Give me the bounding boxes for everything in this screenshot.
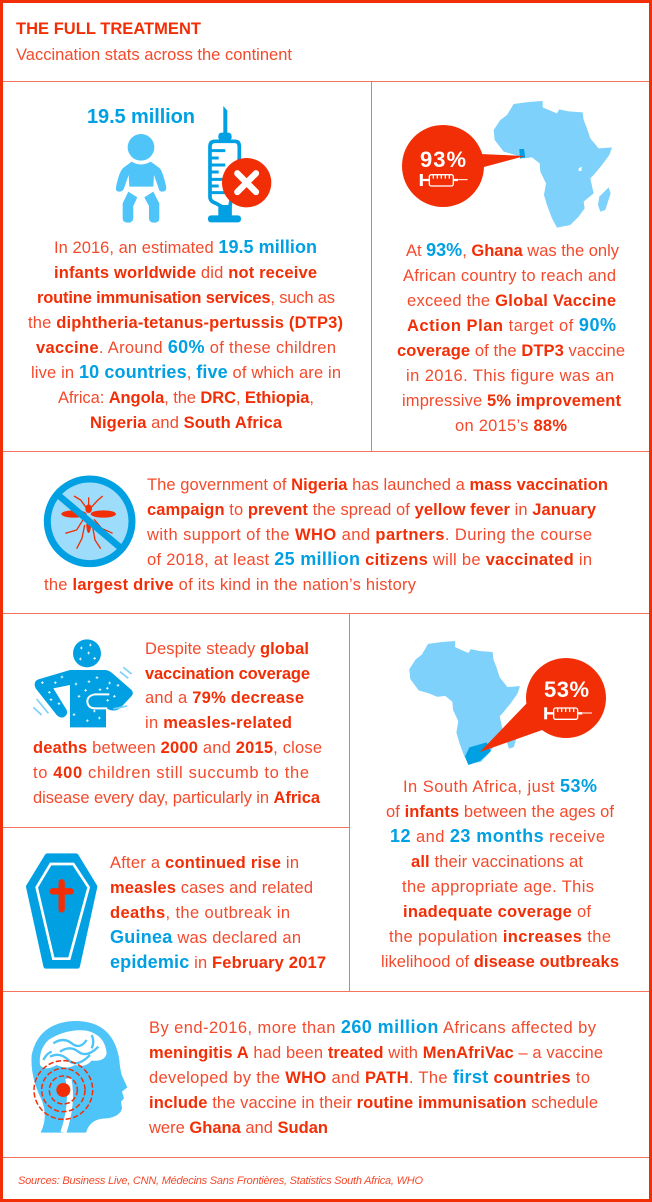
text block: Nigeria <box>44 476 608 594</box>
text block: Nigeria: the largest drive of its kind in the nation’s history <box>44 576 417 594</box>
text block: meningitis: include the vaccine in their routine immunisation schedule <box>149 1094 598 1112</box>
text block: South Africa: likelihood of disease outbreaks <box>381 953 619 971</box>
text block: Ghana: Action Plan target of 90% <box>407 315 616 335</box>
text block: infants: live in 10 countries, five of which are in <box>31 362 341 382</box>
text block: measles: and a 79% decrease <box>145 689 304 707</box>
icon: no mosquito <box>47 479 132 564</box>
subtitle: Vaccination stats across the continent <box>16 46 292 64</box>
stat: 19.5 million: 19.5 million <box>87 106 195 128</box>
callout: 93%: 93% <box>420 147 466 172</box>
text block: Ghana: coverage of the DTP3 vaccine <box>397 342 625 360</box>
callout: 53% <box>480 658 606 752</box>
text block: meningitis: were Ghana and Sudan <box>148 1119 328 1137</box>
text block: South Africa: of infants between the ages of <box>386 803 614 821</box>
text block: Nigeria: campaign to prevent the spread of yellow fever in January <box>147 501 597 519</box>
text block: measles: in measles-related <box>145 714 292 732</box>
panel: measles deaths <box>33 639 322 807</box>
icon: head with brain and pain rings <box>31 1021 127 1133</box>
text block: measles: vaccination coverage <box>145 665 310 683</box>
text block: South Africa: the appropriate age. This <box>402 878 594 896</box>
text block: Guinea: epidemic in February 2017 <box>110 952 326 972</box>
text block: infants: infants worldwide did not receive <box>54 264 317 282</box>
text block: meningitis <box>148 1017 603 1137</box>
icon: syringe <box>421 174 468 186</box>
text block: meningitis: meningitis A had been treated with MenAfriVac – a vaccine <box>149 1044 603 1062</box>
callout: 93% <box>402 125 525 207</box>
text block: infants: Nigeria and South Africa <box>90 414 283 432</box>
text block: Nigeria: with support of the WHO and partners. During the course <box>146 526 592 544</box>
text block: Nigeria: The government of Nigeria has launched a mass vaccination <box>147 476 608 494</box>
text block: meningitis: By end-2016, more than 260 million Africans affected by <box>149 1017 597 1037</box>
panel: 19.5 million infants <box>28 106 343 432</box>
panel: South Africa <box>381 641 619 971</box>
text block: South Africa: In South Africa, just 53% <box>403 776 597 796</box>
text block: infants <box>28 237 343 432</box>
text block: South Africa: the population increases the <box>389 928 611 946</box>
text block: measles: deaths between 2000 and 2015, close <box>33 739 322 757</box>
map: Africa with South Africa <box>409 641 520 765</box>
text block: South Africa: 12 and 23 months receive <box>390 826 605 846</box>
text block: Ghana: impressive 5% improvement <box>402 392 622 410</box>
text block: infants: Africa: Angola, the DRC, Ethiopia, <box>58 389 314 407</box>
title: THE FULL TREATMENT <box>16 20 201 38</box>
panel: meningitis <box>31 1017 603 1137</box>
text block: infants: In 2016, an estimated 19.5 million <box>54 237 317 257</box>
icon: syringe <box>546 707 592 719</box>
text block: Ghana: on 2015’s 88% <box>455 417 567 435</box>
panel: Ghana <box>397 101 625 435</box>
text block: Guinea: Guinea was declared an <box>110 927 301 947</box>
panel: Guinea epidemic <box>29 854 326 972</box>
text block: Guinea: measles cases and related <box>110 879 313 897</box>
text block: Guinea: After a continued rise in <box>110 854 299 872</box>
icon: baby <box>116 134 166 223</box>
panel: Nigeria yellow fever <box>44 476 608 594</box>
text block: measles <box>33 640 322 807</box>
text block: Ghana: in 2016. This figure was an <box>406 367 614 385</box>
text block: South Africa: all their vaccinations at <box>411 853 583 871</box>
text block: Guinea: deaths, the outbreak in <box>110 904 290 922</box>
icon: person with measles rash <box>33 639 133 727</box>
text block: Guinea <box>110 854 326 972</box>
icon: coffin <box>29 856 95 966</box>
text block: infants: the diphtheria-tetanus-pertussis (DTP3) <box>28 314 343 332</box>
map: Africa with Ghana <box>494 101 612 228</box>
callout: 53%: 53% <box>544 677 589 702</box>
text block: South Africa <box>381 776 619 971</box>
text block: measles: Despite steady global <box>145 640 309 658</box>
text block: Ghana <box>397 240 625 435</box>
text block: measles: to 400 children still succumb to the <box>33 764 309 782</box>
text block: Nigeria: of 2018, at least 25 million citizens will be vaccinated in <box>147 549 592 569</box>
text block: meningitis: developed by the WHO and PATH. The first countries to <box>149 1067 590 1087</box>
text block: Ghana: exceed the Global Vaccine <box>407 292 616 310</box>
text block: Ghana: African country to reach and <box>403 267 616 285</box>
text block: infants: routine immunisation services, such as <box>37 289 335 307</box>
text block: Ghana: At 93%, Ghana was the only <box>406 240 620 260</box>
text block: South Africa: inadequate coverage of <box>403 903 591 921</box>
text block: measles: disease every day, particularly in Africa <box>33 789 321 807</box>
text block: infants: vaccine. Around 60% of these children <box>36 337 336 357</box>
sources: Sources: Business Live, CNN, Médecins Sans Frontières, Statistics South Africa, WHO <box>18 1175 423 1187</box>
icon: syringe with cross <box>208 106 271 222</box>
